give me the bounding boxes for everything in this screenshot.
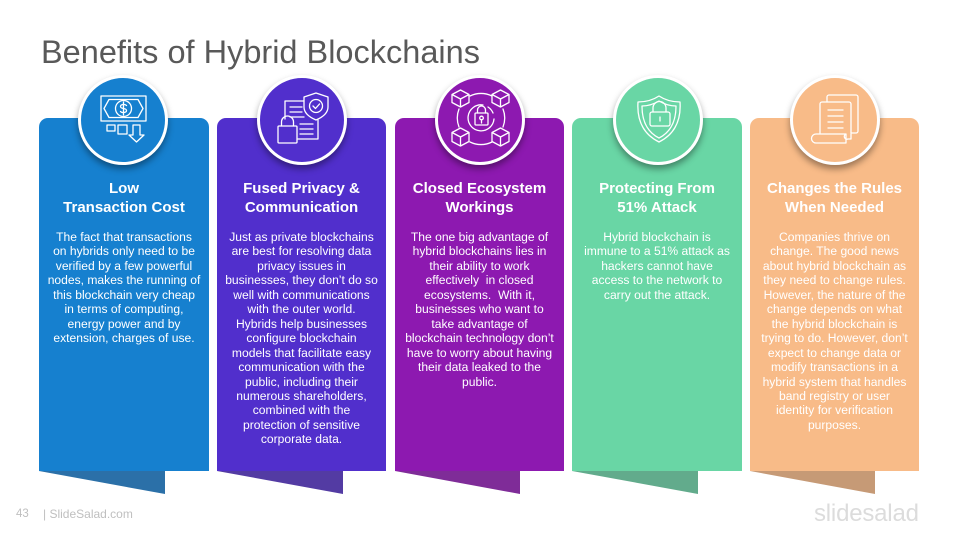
body text: the hybrid blockchain is	[772, 317, 897, 331]
body text: The fact that transactions	[56, 230, 192, 244]
body text: blockchain technology don’t	[405, 331, 554, 345]
body text: public, including their	[245, 375, 358, 389]
body text: Hybrid blockchain is	[603, 230, 711, 244]
body text: on hybrids only need to be	[53, 244, 195, 258]
panel: protecting from attack	[572, 74, 742, 494]
title: Benefits of Hybrid Blockchains	[41, 34, 480, 70]
body text: configure blockchain	[246, 331, 357, 345]
body text: with the outer world.	[247, 302, 356, 316]
body text: Companies thrive on	[779, 230, 890, 244]
body text	[48, 230, 200, 345]
body text	[225, 230, 378, 446]
body text: businesses who want to	[415, 302, 544, 316]
body text: expect to change data or	[768, 346, 901, 360]
body text: take advantage of	[431, 317, 528, 331]
body text: verified by a few powerful	[56, 259, 192, 273]
body text: models that facilitate easy	[232, 346, 371, 360]
heading	[599, 180, 715, 216]
body text: ecosystems. With it,	[424, 288, 535, 302]
heading: Changes the Rules	[767, 180, 902, 197]
icon: shield with lock	[612, 75, 702, 165]
heading: Workings	[445, 199, 514, 216]
body text: are best for resolving data	[232, 244, 371, 258]
heading: Closed Ecosystem	[413, 180, 546, 197]
body text	[584, 230, 730, 302]
body text: immune to a 51% attack as	[584, 244, 730, 258]
body text: band registry or user	[779, 389, 890, 403]
card fold	[217, 471, 343, 494]
logo wordmark: slidesalad	[814, 500, 919, 527]
heading	[767, 180, 902, 216]
body text: change. The good news	[770, 244, 899, 258]
body text: numerous shareholders,	[236, 389, 367, 403]
body text: their ability to work	[429, 259, 530, 273]
body text: The one big advantage of	[411, 230, 548, 244]
body text: access to the network to	[592, 273, 722, 287]
body text: this blockchain very cheap	[53, 288, 195, 302]
body text: carry out the attack.	[604, 288, 710, 302]
body text: in terms of computing,	[64, 302, 183, 316]
heading: Transaction Cost	[63, 199, 185, 216]
body text: privacy issues in	[257, 259, 346, 273]
card background	[750, 118, 919, 471]
card fold	[572, 471, 698, 494]
body text: Just as private blockchains	[229, 230, 374, 244]
heading	[413, 180, 546, 216]
heading: Protecting From	[599, 180, 715, 197]
body text: public.	[462, 375, 497, 389]
icon: connected cubes with lock	[435, 75, 525, 165]
body text: trying to do. However, don’t	[761, 331, 908, 345]
footer site name: | SlideSalad.com	[43, 507, 133, 521]
heading: 51% Attack	[617, 199, 697, 216]
body text: energy power and by	[68, 317, 180, 331]
card background	[217, 118, 386, 471]
card background	[395, 118, 564, 471]
body text: their data leaked to the	[418, 360, 541, 374]
body text	[761, 230, 908, 432]
heading	[63, 180, 185, 216]
body text: about hybrid blockchain as	[763, 259, 906, 273]
body text: combined with the	[253, 403, 350, 417]
heading: When Needed	[785, 199, 884, 216]
card fold	[750, 471, 875, 494]
body text: purposes.	[808, 418, 861, 432]
body text: extension, charges of use.	[53, 331, 195, 345]
body text: hackers cannot have	[601, 259, 713, 273]
body text: However, the nature of the	[764, 288, 905, 302]
icon: document, lock and shield	[256, 75, 346, 165]
body text: nodes, makes the running of	[48, 273, 200, 287]
body text: corporate data.	[261, 432, 342, 446]
body text: identity for verification	[776, 403, 893, 417]
body text: hybrid blockchains lies in	[413, 244, 546, 258]
heading: Communication	[245, 199, 358, 216]
card fold	[39, 471, 165, 494]
body text: communication with the	[238, 360, 365, 374]
heading: Fused Privacy &	[243, 180, 360, 197]
panel: low transaction cost	[39, 74, 209, 494]
heading	[243, 180, 360, 216]
body text: well with communications	[233, 288, 370, 302]
body text: change depends on what	[767, 302, 902, 316]
icon: money cost	[78, 75, 168, 165]
heading: Low	[109, 180, 139, 197]
body text: have to worry about having	[407, 346, 552, 360]
panel: changes the rules	[750, 74, 919, 494]
body text: hybrid system that handles	[763, 375, 906, 389]
body text: effectively in closed	[425, 273, 534, 287]
card background	[39, 118, 209, 471]
body text	[405, 230, 554, 389]
body text: Hybrids help businesses	[236, 317, 367, 331]
body text: modify transactions in a	[771, 360, 898, 374]
panel: closed ecosystem	[395, 74, 564, 494]
card background	[572, 118, 742, 471]
panel: fused privacy	[217, 74, 386, 494]
icon: scroll document	[790, 75, 880, 165]
body text: protection of sensitive	[243, 418, 360, 432]
card fold	[395, 471, 520, 494]
page number: 43	[16, 508, 29, 520]
body text: they need to change rules.	[763, 273, 906, 287]
body text: businesses, they don’t do so	[225, 273, 378, 287]
